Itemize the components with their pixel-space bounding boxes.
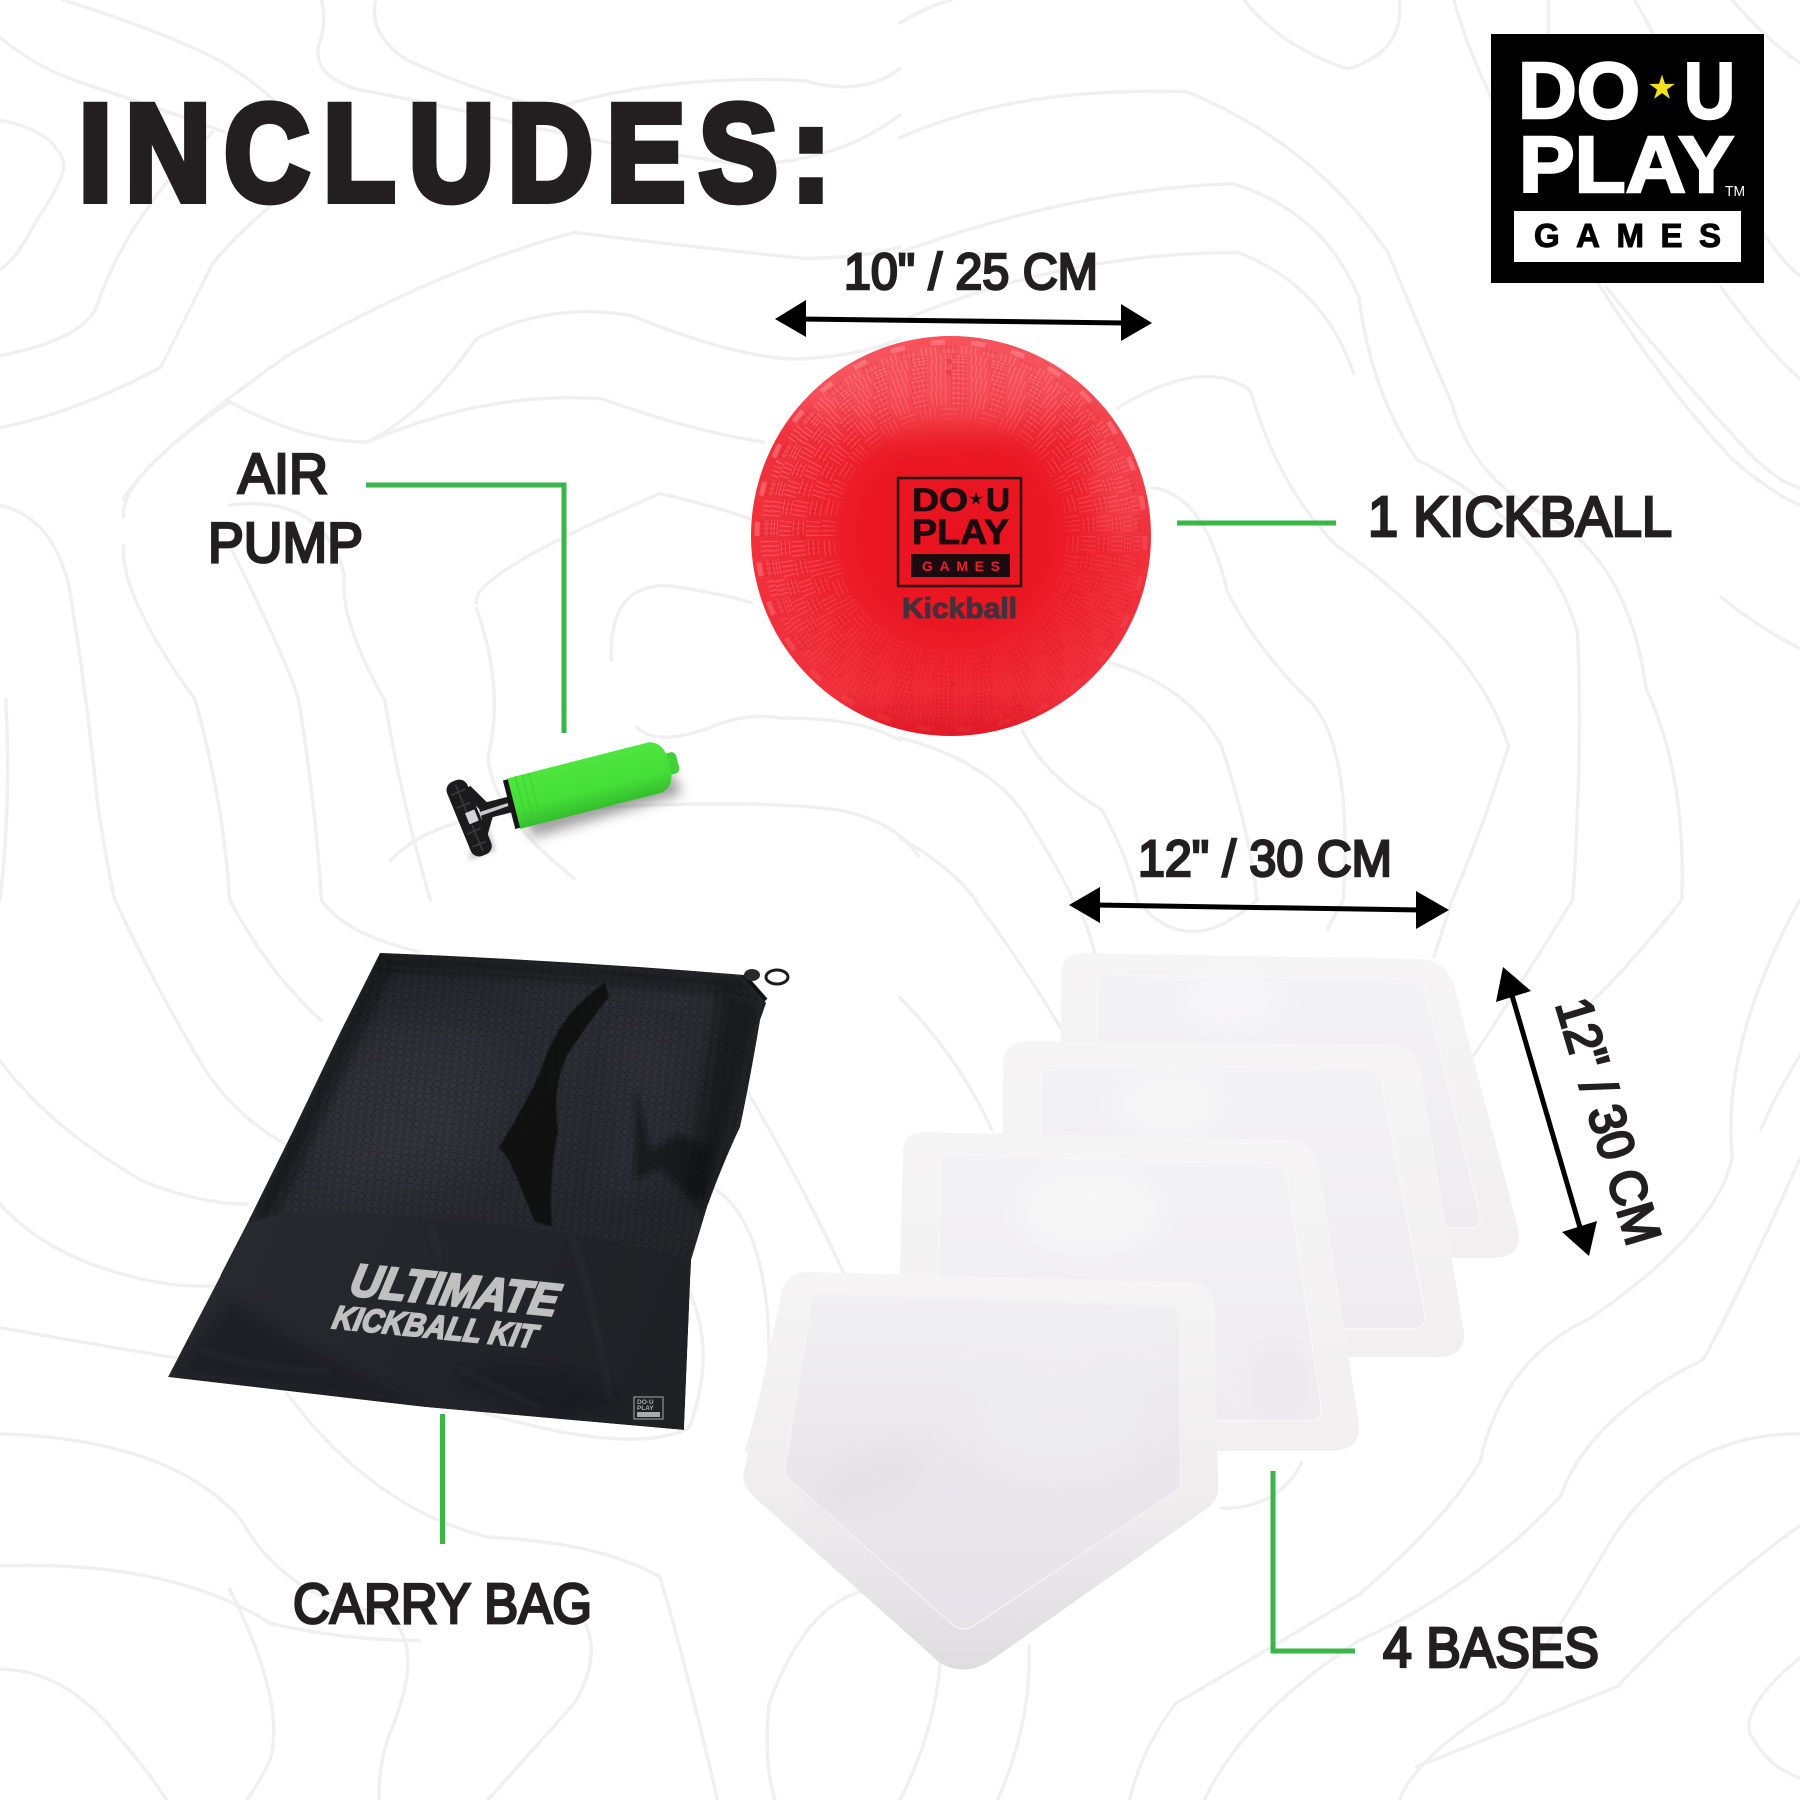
bag cord and ring bbox=[744, 975, 766, 1000]
icon: carry bag bbox=[160, 945, 788, 1430]
bag print: KICKBALL KIT bbox=[329, 1300, 543, 1356]
callout: four bases bbox=[1273, 1471, 1599, 1680]
ball logo: GAMES bbox=[922, 558, 1000, 574]
dimension: base width bbox=[1069, 830, 1449, 929]
dimension: ball width bbox=[775, 243, 1152, 341]
brand logo: Do U Play Games: DO bbox=[1518, 46, 1640, 135]
title: INCLUDES: bbox=[79, 77, 831, 230]
brand logo: Do U Play Games bbox=[1491, 34, 1764, 283]
ball logo bbox=[898, 478, 1021, 586]
bag mini logo bbox=[634, 1397, 663, 1419]
brand logo: Do U Play Games: PLAY bbox=[1519, 120, 1734, 209]
icon: red kickball bbox=[751, 336, 1151, 736]
base 4: home plate bbox=[743, 1272, 1218, 1670]
ball surface texture bbox=[757, 342, 1145, 730]
base 3 bbox=[900, 1132, 1359, 1451]
icon: green air pump bbox=[443, 725, 689, 862]
ball logo: PLAY bbox=[912, 513, 1009, 552]
callout: air pump bbox=[208, 442, 564, 733]
base 2 bbox=[1003, 1041, 1464, 1357]
callout: carry bag: CARRY BAG bbox=[293, 1572, 592, 1636]
callout: one kickball: 1 KICKBALL bbox=[1368, 485, 1672, 549]
ball wordmark: Kickball bbox=[902, 593, 1017, 625]
bag mini logo: DO·U bbox=[637, 1399, 654, 1406]
base 1 bbox=[1061, 953, 1519, 1258]
bag print bbox=[329, 1254, 565, 1356]
dimension: base depth: 12" / 30 CM bbox=[1545, 991, 1672, 1251]
brand logo: Do U Play Games: TM bbox=[1725, 183, 1745, 200]
mesh fold bbox=[499, 983, 609, 1226]
callout: air pump: AIR bbox=[238, 442, 328, 506]
dimension: ball width: 10" / 25 CM bbox=[844, 243, 1098, 300]
ball logo: U bbox=[986, 482, 1010, 518]
ball logo: DO bbox=[912, 482, 968, 518]
callout: four bases: 4 BASES bbox=[1383, 1616, 1599, 1680]
bag mini logo: PLAY bbox=[637, 1405, 654, 1412]
dimension: base width: 12" / 30 CM bbox=[1138, 830, 1392, 887]
brand logo: Do U Play Games: GAMES bbox=[1534, 217, 1721, 254]
brand logo: Do U Play Games: U bbox=[1684, 46, 1735, 135]
callout: air pump: PUMP bbox=[208, 511, 363, 575]
bag print: ULTIMATE bbox=[346, 1254, 565, 1326]
dimension: base depth bbox=[1496, 967, 1672, 1256]
icon: four bases bbox=[743, 953, 1519, 1670]
